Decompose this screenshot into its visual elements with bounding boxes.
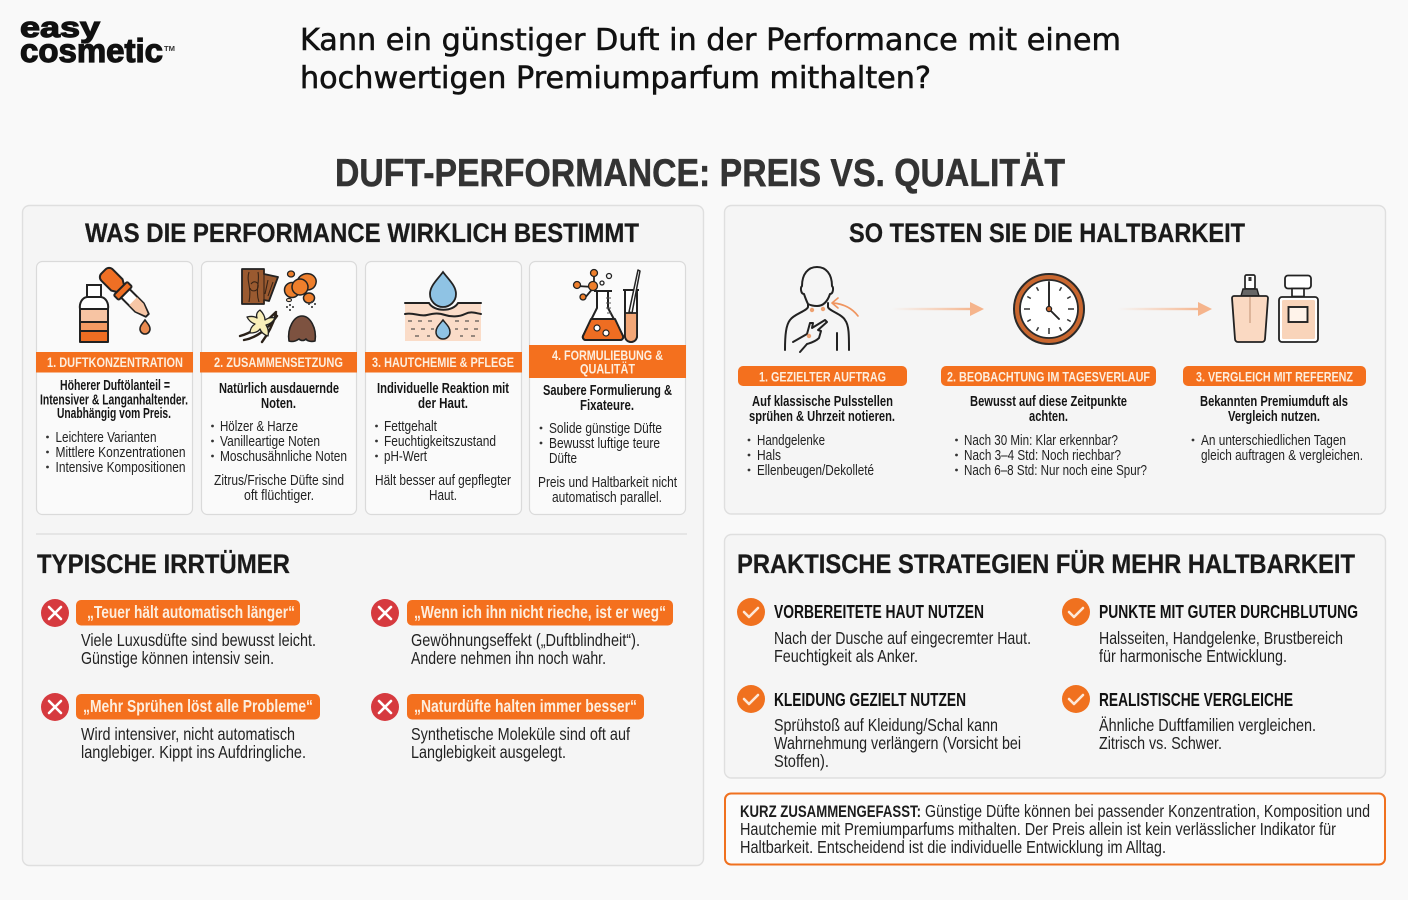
misconception 1: Viele Luxusdüfte sind bewusst leicht. [81, 630, 316, 650]
strategy 3 [1062, 598, 1358, 666]
strategy 2: Stoffen). [774, 751, 829, 771]
card 2: Zusammensetzung: oft flüchtiger. [244, 488, 314, 504]
misconception 4: Synthetische Moleküle sind oft auf [411, 724, 630, 744]
icon: wood, amber, vanilla, musk [240, 269, 316, 342]
page question heading: hochwertigen Premiumparfum mithalten? [300, 61, 931, 96]
card 2: Zusammensetzung: Natürlich ausdauernde [219, 381, 339, 397]
panel: practical strategies [724, 534, 1386, 778]
misconception 1: Günstige können intensiv sein. [81, 648, 274, 668]
strategy 1: Feuchtigkeit als Anker. [774, 646, 918, 666]
card 2: Zusammensetzung: Zitrus/Frische Düfte sind [214, 473, 344, 489]
strategy 4: Ähnliche Duftfamilien vergleichen. [1099, 715, 1316, 735]
icon: red cross [41, 599, 69, 627]
icon: orange check [1062, 685, 1090, 713]
misconception 4: Langlebigkeit ausgelegt. [411, 742, 566, 762]
card 4: Formulierung und Qualität: 4. FORMULIEBUNG & [552, 347, 663, 363]
arrow: step 1 to 2 [892, 302, 984, 316]
page question heading [300, 23, 1121, 96]
icon: molecule, flask, test tube [574, 270, 640, 342]
heading: test longevity: SO TESTEN SIE DIE HALTBARKEIT [849, 218, 1245, 248]
step 3: compare with reference: gleich auftragen & vergleichen. [1201, 448, 1363, 464]
arrow: step 2 to 3 [1118, 302, 1212, 316]
misconception 3: Gewöhnungseffekt („Duftblindheit“). [411, 630, 640, 650]
icon: clock [1014, 274, 1084, 344]
card 2: Zusammensetzung: Moschusähnliche Noten [220, 449, 347, 465]
card 4: Formulierung und Qualität: automatisch parallel. [552, 490, 662, 506]
card 3: Hautchemie und Pflege [365, 262, 522, 514]
misconception 3: Andere nehmen ihn noch wahr. [411, 648, 606, 668]
step 2: observation during the day: Nach 3–4 Std: Noch riechbar? [964, 448, 1121, 464]
card 3: Hautchemie und Pflege: Hält besser auf gepflegter [375, 473, 511, 489]
card 1: Duftkonzentration [36, 262, 193, 514]
panel: how to test longevity [724, 206, 1386, 514]
step 2: observation during the day: Nach 30 Min: Klar erkennbar? [964, 433, 1118, 449]
step 1: targeted application: sprühen & Uhrzeit notieren. [749, 409, 895, 425]
misconception 2: langlebiger. Kippt ins Aufdringliche. [81, 742, 306, 762]
panel: left [22, 206, 704, 866]
icon: orange check [737, 598, 765, 626]
card 1: Duftkonzentration: Leichtere Varianten [56, 430, 156, 446]
card 3: Hautchemie und Pflege: Feuchtigkeitszustand [384, 434, 496, 450]
card 1: Duftkonzentration: Höherer Duftölanteil = [60, 378, 170, 394]
misconception 2 [41, 693, 320, 762]
misconception 1 [41, 599, 316, 668]
step 2: observation during the day [941, 274, 1156, 479]
step 2: observation during the day: achten. [1029, 409, 1068, 425]
misconception 4: „Naturdüfte halten immer besser“ [414, 696, 637, 716]
step 1: targeted application [738, 267, 907, 479]
step 1: targeted application: 1. GEZIELTER AUFTRAG [759, 368, 886, 384]
step 3: compare with reference: Vergleich nutzen. [1228, 409, 1320, 425]
page question heading: Kann ein günstiger Duft in der Performance mit einem [300, 23, 1121, 58]
strategy 3: Halsseiten, Handgelenke, Brustbereich [1099, 628, 1343, 648]
step 2: observation during the day: Nach 6–8 Std: Nur noch eine Spur? [964, 463, 1147, 479]
card 4: Formulierung und Qualität: QUALITÄT [580, 360, 635, 376]
step 1: targeted application: Handgelenke [757, 433, 825, 449]
step 3: compare with reference: An unterschiedlichen Tagen [1201, 433, 1346, 449]
logo: easy cosmetic: cosmetic [20, 32, 163, 69]
misconception 4 [371, 693, 644, 762]
strategy 1: Nach der Dusche auf eingecremter Haut. [774, 628, 1031, 648]
callout: summary [725, 794, 1385, 864]
misconception 2: Wird intensiver, nicht automatisch [81, 724, 295, 744]
card 1: Duftkonzentration: Intensiver & Langanhaltender. [40, 392, 188, 408]
icon: two perfume bottles [1232, 275, 1318, 342]
misconception 1: „Teuer hält automatisch länger“ [87, 602, 295, 622]
strategy 2: Wahrnehmung verlängern (Vorsicht bei [774, 733, 1021, 753]
card 1: Duftkonzentration: Intensive Kompositionen [56, 460, 186, 476]
strategy 4 [1062, 685, 1316, 753]
logo: easy cosmetic: easy [20, 12, 100, 44]
card 2: Zusammensetzung: Hölzer & Harze [220, 419, 298, 435]
step 1: targeted application: Ellenbeugen/Dekolleté [757, 463, 874, 479]
heading: typical misconceptions: TYPISCHE IRRTÜMER [37, 549, 290, 579]
card 2: Zusammensetzung: Vanilleartige Noten [220, 434, 320, 450]
step 3: compare with reference [1183, 275, 1366, 464]
main title: DUFT-PERFORMANCE: PREIS VS. QUALITÄT [335, 152, 1065, 195]
icon: red cross [371, 693, 399, 721]
strategy 1 [737, 598, 1031, 666]
strategy 1: VORBEREITETE HAUT NUTZEN [774, 602, 984, 622]
heading: what determines performance: WAS DIE PERFORMANCE WIRKLICH BESTIMMT [85, 218, 639, 248]
icon: water drop on skin [405, 272, 481, 341]
callout: summary: Haltbarkeit. Entscheidend ist die individuelle Entwicklung im Alltag. [740, 837, 1166, 857]
strategy 4: Zitrisch vs. Schwer. [1099, 733, 1222, 753]
card 4: Formulierung und Qualität: Solide günstige Düfte [549, 421, 662, 437]
icon: orange check [1062, 598, 1090, 626]
strategy 4: REALISTISCHE VERGLEICHE [1099, 690, 1293, 710]
card 3: Hautchemie und Pflege: 3. HAUTCHEMIE & PFLEGE [372, 354, 514, 370]
card 1: Duftkonzentration: Mittlere Konzentrationen [56, 445, 186, 461]
card 2: Zusammensetzung: 2. ZUSAMMENSETZUNG [214, 354, 343, 370]
icon: orange check [737, 685, 765, 713]
strategy 3: für harmonische Entwicklung. [1099, 646, 1287, 666]
card 3: Hautchemie und Pflege: der Haut. [418, 396, 468, 412]
heading: strategies: PRAKTISCHE STRATEGIEN FÜR MEHR HALTBARKEIT [737, 549, 1355, 579]
card 4: Formulierung und Qualität: Bewusst luftige teure [549, 436, 660, 452]
card 1: Duftkonzentration: Unabhängig vom Preis. [57, 406, 171, 422]
misconception 3 [371, 599, 673, 668]
card 2: Zusammensetzung [200, 262, 357, 514]
strategy 2 [737, 685, 1021, 771]
icon: red cross [41, 693, 69, 721]
step 2: observation during the day: 2. BEOBACHTUNG IM TAGESVERLAUF [947, 368, 1150, 384]
icon: bottle and dropper [80, 265, 154, 342]
card 3: Hautchemie und Pflege: Individuelle Reaktion mit [377, 381, 509, 397]
card 2: Zusammensetzung: Noten. [261, 396, 296, 412]
card 4: Formulierung und Qualität: Preis und Haltbarkeit nicht [538, 475, 677, 491]
logo: easy cosmetic [20, 12, 175, 69]
card 4: Formulierung und Qualität: Fixateure. [580, 398, 634, 414]
step 3: compare with reference: Bekannten Premiumduft als [1200, 394, 1348, 410]
step 1: targeted application: Hals [757, 448, 781, 464]
card 3: Hautchemie und Pflege: Fettgehalt [384, 419, 437, 435]
card 1: Duftkonzentration: 1. DUFTKONZENTRATION [47, 354, 183, 370]
card 4: Formulierung und Qualität: Saubere Formulierung & [543, 383, 672, 399]
strategy 2: KLEIDUNG GEZIELT NUTZEN [774, 690, 966, 710]
card 4: Formulierung und Qualität [529, 262, 686, 514]
logo: easy cosmetic: TM [164, 46, 175, 53]
callout: summary: KURZ ZUSAMMENGEFASST: [740, 802, 921, 821]
step 1: targeted application: Auf klassische Pulsstellen [752, 394, 893, 410]
icon: person with pulse points [785, 267, 858, 352]
card 4: Formulierung und Qualität: Düfte [549, 451, 577, 467]
misconception 2: „Mehr Sprühen löst alle Probleme“ [83, 696, 313, 716]
step 2: observation during the day: Bewusst auf diese Zeitpunkte [970, 394, 1127, 410]
misconception 3: „Wenn ich ihn nicht rieche, ist er weg“ [414, 602, 666, 622]
step 3: compare with reference: 3. VERGLEICH MIT REFERENZ [1196, 368, 1353, 384]
card 3: Hautchemie und Pflege: Haut. [429, 488, 457, 504]
strategy 2: Sprühstoß auf Kleidung/Schal kann [774, 715, 998, 735]
card 3: Hautchemie und Pflege: pH-Wert [384, 449, 427, 465]
icon: red cross [371, 599, 399, 627]
